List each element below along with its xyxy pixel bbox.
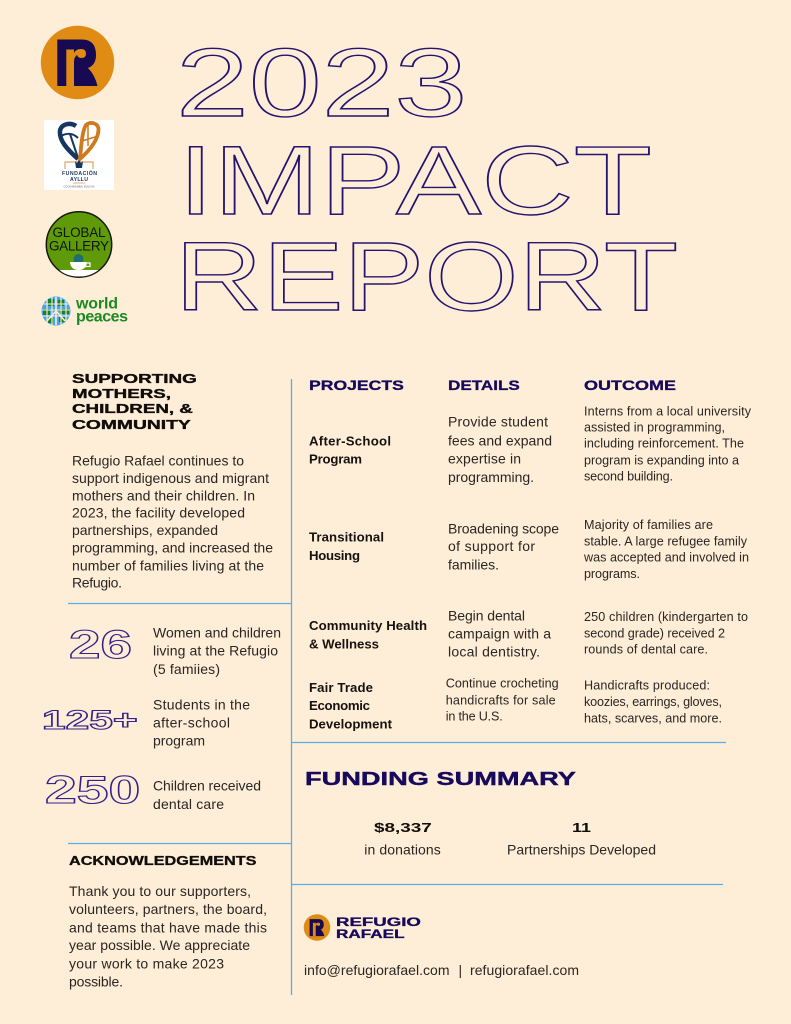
row: fair trade: hats, scarves, and more. (584, 711, 722, 725)
row: after-school program: Provide student (448, 414, 548, 430)
row: fair trade: Development (309, 716, 393, 731)
row: community health: second grade) received 2 (584, 626, 725, 640)
logo: Fundacion Ayllu: COCHABAMBA, BOLIVIA (64, 184, 95, 188)
text block: thank you (69, 883, 267, 990)
text block: mission: partnerships, expanded (72, 522, 218, 538)
stat label: students: Students in the (153, 696, 250, 712)
stat label: students: program (153, 733, 205, 749)
stat label: women and children: (5 famiies) (153, 661, 220, 677)
text block: mission: programming, and increased the (72, 539, 273, 555)
logo: Fundacion Ayllu (44, 120, 114, 190)
row: transitional housing (309, 518, 749, 581)
brand name: RAFAEL (336, 929, 405, 941)
stat value: partnerships: 11 (572, 820, 591, 835)
text block: mission: mothers and their children. In (72, 487, 255, 503)
row: fair trade: in the U.S. (446, 710, 503, 724)
stat label: women and children: living at the Refugio (153, 643, 278, 659)
text block: mission: Refugio Rafael continues to (72, 453, 244, 469)
row: after-school program: After-School (309, 433, 391, 448)
row: fair trade: Economic (309, 698, 370, 713)
stat label: women and children (153, 625, 281, 677)
text block: thank you: year possible. We appreciate (69, 937, 250, 953)
row: community health: Begin dental (448, 608, 525, 624)
row: fair trade: Fair Trade (309, 680, 373, 695)
logo: Fundacion Ayllu: FUNDACIÓN (62, 169, 97, 177)
stat label: donations: in donations (364, 841, 441, 857)
panel: contact footer (304, 914, 579, 978)
row: transitional housing: stable. A large refugee family (584, 534, 748, 548)
row: community health: rounds of dental care. (584, 643, 708, 657)
logo: World Peaces: peaces (76, 308, 128, 326)
row: transitional housing: Housing (309, 548, 360, 563)
text block: thank you: Thank you to our supporters, (69, 883, 251, 899)
row: fair trade: handicrafts for sale (446, 693, 556, 707)
text block: thank you: possible. (69, 974, 123, 990)
logo: Fundacion Ayllu: AYLLU (70, 177, 88, 183)
row: fair trade: koozies, earrings, gloves, (584, 695, 722, 709)
row: fair trade (309, 677, 722, 731)
row: community health: & Wellness (309, 636, 379, 651)
text block: mission: Refugio. (72, 575, 122, 591)
panel: supporting mothers (72, 372, 273, 591)
logo: Refugio Rafael (41, 26, 114, 99)
stat label: students (153, 696, 250, 749)
heading: supporting mothers: CHILDREN, & (72, 402, 193, 416)
row: community health: local dentistry. (448, 644, 540, 660)
panel: funding summary (305, 768, 656, 858)
heading: supporting mothers: COMMUNITY (72, 418, 191, 432)
row: transitional housing: of support for (448, 538, 535, 554)
stat label: children: Children received (153, 778, 261, 794)
column headings (309, 377, 676, 393)
row: after-school program: expertise in (448, 450, 521, 466)
row: after-school program: second building. (584, 470, 673, 484)
panel: acknowledgements (69, 854, 267, 990)
column headings: OUTCOME (584, 377, 676, 393)
heading: supporting mothers: SUPPORTING (72, 372, 197, 386)
divider lines (68, 379, 726, 995)
text block: mission: 2023, the facility developed (72, 505, 245, 521)
brand name: REFUGIO (336, 917, 421, 929)
text block: mission: number of families living at the (72, 557, 264, 573)
row: after-school program: fees and expand (448, 432, 552, 448)
text block: mission: support indigenous and migrant (72, 470, 269, 486)
row: after-school program: programming. (448, 469, 534, 485)
heading: supporting mothers (72, 372, 197, 432)
heading: funding summary: FUNDING SUMMARY (305, 768, 576, 789)
row: transitional housing: Majority of families are (584, 518, 713, 532)
panel: statistics (44, 625, 281, 812)
row: transitional housing: was accepted and involved in (583, 551, 749, 565)
contact details: info@refugiorafael.com (304, 962, 450, 978)
contact details (304, 962, 579, 978)
row: transitional housing: families. (448, 556, 499, 572)
row: community health: 250 children (kindergarten to (584, 610, 748, 624)
row: after-school program: assisted in programming, (584, 421, 725, 435)
heading: acknowledgements: ACKNOWLEDGEMENTS (69, 854, 257, 868)
row: transitional housing: Transitional (309, 530, 384, 545)
title (182, 48, 676, 312)
row: after-school program: Program (309, 451, 362, 466)
stat label: children (153, 778, 261, 812)
row: community health: campaign with a (448, 625, 551, 641)
column headings: DETAILS (448, 377, 520, 393)
brand name (336, 917, 421, 941)
logo: World Peaces (42, 296, 128, 326)
row: after-school program: including reinforcement. The (584, 437, 744, 451)
row: after-school program: program is expanding into a (584, 453, 739, 467)
text block: thank you: your work to make 2023 (69, 955, 224, 971)
contact details: | (458, 962, 462, 978)
text block: mission (72, 453, 273, 591)
logo: Global Gallery: GLOBAL (52, 225, 106, 240)
logo: Global Gallery: GALLERY (49, 239, 109, 254)
logo: Global Gallery (46, 212, 112, 277)
row: fair trade: Continue crocheting (446, 677, 559, 691)
panel: projects table (309, 377, 752, 731)
stat value: donations: $8,337 (374, 820, 431, 835)
row: community health (309, 608, 748, 660)
contact details: refugiorafael.com (470, 962, 579, 978)
row: after-school program (309, 405, 752, 485)
text block: thank you: volunteers, partners, the board, (69, 901, 267, 917)
row: community health: Community Health (309, 618, 427, 633)
stat label: partnerships: Partnerships Developed (507, 841, 656, 857)
column headings: PROJECTS (309, 377, 404, 393)
stat label: students: after-school (153, 714, 230, 730)
logo: World Peaces: world (75, 296, 118, 312)
stat label: women and children: Women and children (153, 625, 281, 641)
row: transitional housing: Broadening scope (448, 520, 559, 536)
stat label: children: dental care (153, 796, 224, 812)
heading: supporting mothers: MOTHERS, (72, 387, 171, 401)
row: fair trade: Handicrafts produced: (584, 678, 710, 692)
row: after-school program: Interns from a local university (584, 405, 752, 419)
text block: thank you: and teams that have made this (69, 919, 267, 935)
row: transitional housing: programs. (584, 567, 640, 581)
logo: small Refugio Rafael (304, 914, 330, 941)
